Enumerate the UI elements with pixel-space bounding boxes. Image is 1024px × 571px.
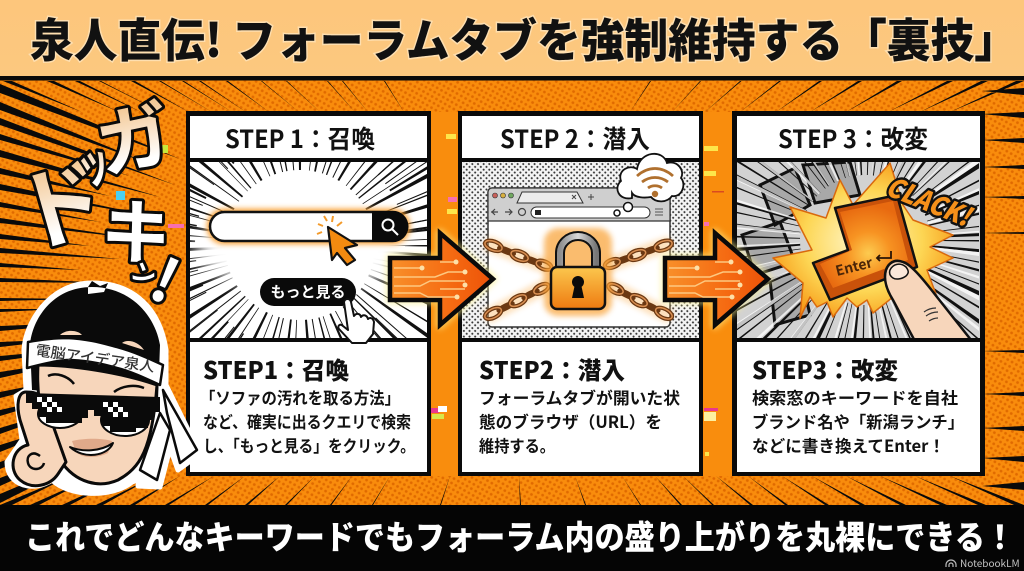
thought bubble with wifi xyxy=(614,154,683,216)
forehead patches xyxy=(60,331,144,350)
finger pressing key xyxy=(885,261,975,345)
headband xyxy=(27,338,163,385)
mascot: 電脳アイデア泉人 xyxy=(7,281,200,493)
sound effect lettering: ドッガキーン! xyxy=(0,74,194,321)
title band xyxy=(0,0,1024,80)
eyes under sunglasses xyxy=(38,400,82,428)
sound effect lettering: ドッガキーン!: ド xyxy=(0,127,120,273)
glitch colour specks xyxy=(116,134,724,456)
chains xyxy=(483,238,674,321)
illustration: speed-line burst xyxy=(190,162,427,338)
step 1 description: 「ソファの汚れを取る方法」 xyxy=(200,385,400,409)
CLACK! sound effect: CLACK! xyxy=(881,165,979,235)
step 2 description: 態のブラウザ（URL）を xyxy=(479,409,662,433)
step 1 description: STEP1：召喚 xyxy=(203,351,349,386)
step 3 description: STEP3：改変 xyxy=(752,351,898,386)
magnifier icon xyxy=(382,220,398,235)
arrow: step 2 to step 3 xyxy=(665,233,768,325)
step 2 description xyxy=(479,351,680,457)
padlock xyxy=(544,228,612,316)
sound effect lettering: ドッガキーン!: ッ xyxy=(66,122,119,201)
arrow: step 1 to step 2 xyxy=(390,233,493,325)
face xyxy=(38,365,157,484)
step 2 heading: STEP 2：潜入 xyxy=(500,120,650,156)
sound effect lettering: ドッガキーン!: ン xyxy=(126,251,163,293)
sunglass highlights xyxy=(37,397,128,417)
step 3 description: などに書き換えてEnter！ xyxy=(752,433,945,457)
panel: STEP 3 xyxy=(732,111,985,476)
more button: もっと見る xyxy=(270,281,346,302)
step 3 description: ブランド名や「新潟ランチ」 xyxy=(752,409,964,433)
pixel sunglasses xyxy=(26,393,160,432)
sound effect lettering: ドッガキーン!: ガ xyxy=(85,74,180,195)
step 1 description xyxy=(200,351,415,457)
step 3 description xyxy=(752,351,964,457)
more button xyxy=(260,278,356,306)
background: orange halftone with speed lines xyxy=(0,80,1024,506)
panel: STEP 1 xyxy=(186,111,431,476)
step 1 heading: STEP 1：召喚 xyxy=(225,120,375,156)
browser window xyxy=(488,188,670,327)
mascot white outline xyxy=(7,283,200,493)
explosion burst xyxy=(773,163,953,318)
bottom banner xyxy=(0,505,1024,571)
step 2 description: フォーラムタブが開いた状 xyxy=(479,385,680,409)
smile xyxy=(72,439,112,457)
step 3 description: 検索窓のキーワードを自社 xyxy=(752,385,959,409)
hair xyxy=(30,281,160,400)
key label: Enter xyxy=(833,252,875,281)
keyboard background with speed lines xyxy=(737,162,979,338)
headband text: 電脳アイデア泉人 xyxy=(34,339,157,377)
search bar with glow xyxy=(207,209,410,244)
NotebookLM watermark: NotebookLM xyxy=(960,555,1020,570)
hand cursor xyxy=(338,299,374,343)
hand with swirl xyxy=(13,392,66,486)
sound effect lettering: ドッガキーン!: キ xyxy=(93,172,182,285)
step 2 description: STEP2：潜入 xyxy=(479,351,625,386)
cursor arrow with sparks xyxy=(317,216,357,265)
headband tails xyxy=(140,390,197,480)
step 3 heading: STEP 3：改変 xyxy=(778,120,928,156)
eyebrows xyxy=(48,374,144,392)
sound effect lettering: ドッガキーン!: ! xyxy=(139,233,194,321)
step 1 description: し、「もっと見る」をクリック。 xyxy=(203,433,415,457)
panel: STEP 2 xyxy=(458,111,703,476)
step 1 description: など、確実に出るクエリで検索 xyxy=(203,409,411,433)
Enter key xyxy=(813,195,917,300)
step 2 description: 維持する。 xyxy=(479,433,555,457)
